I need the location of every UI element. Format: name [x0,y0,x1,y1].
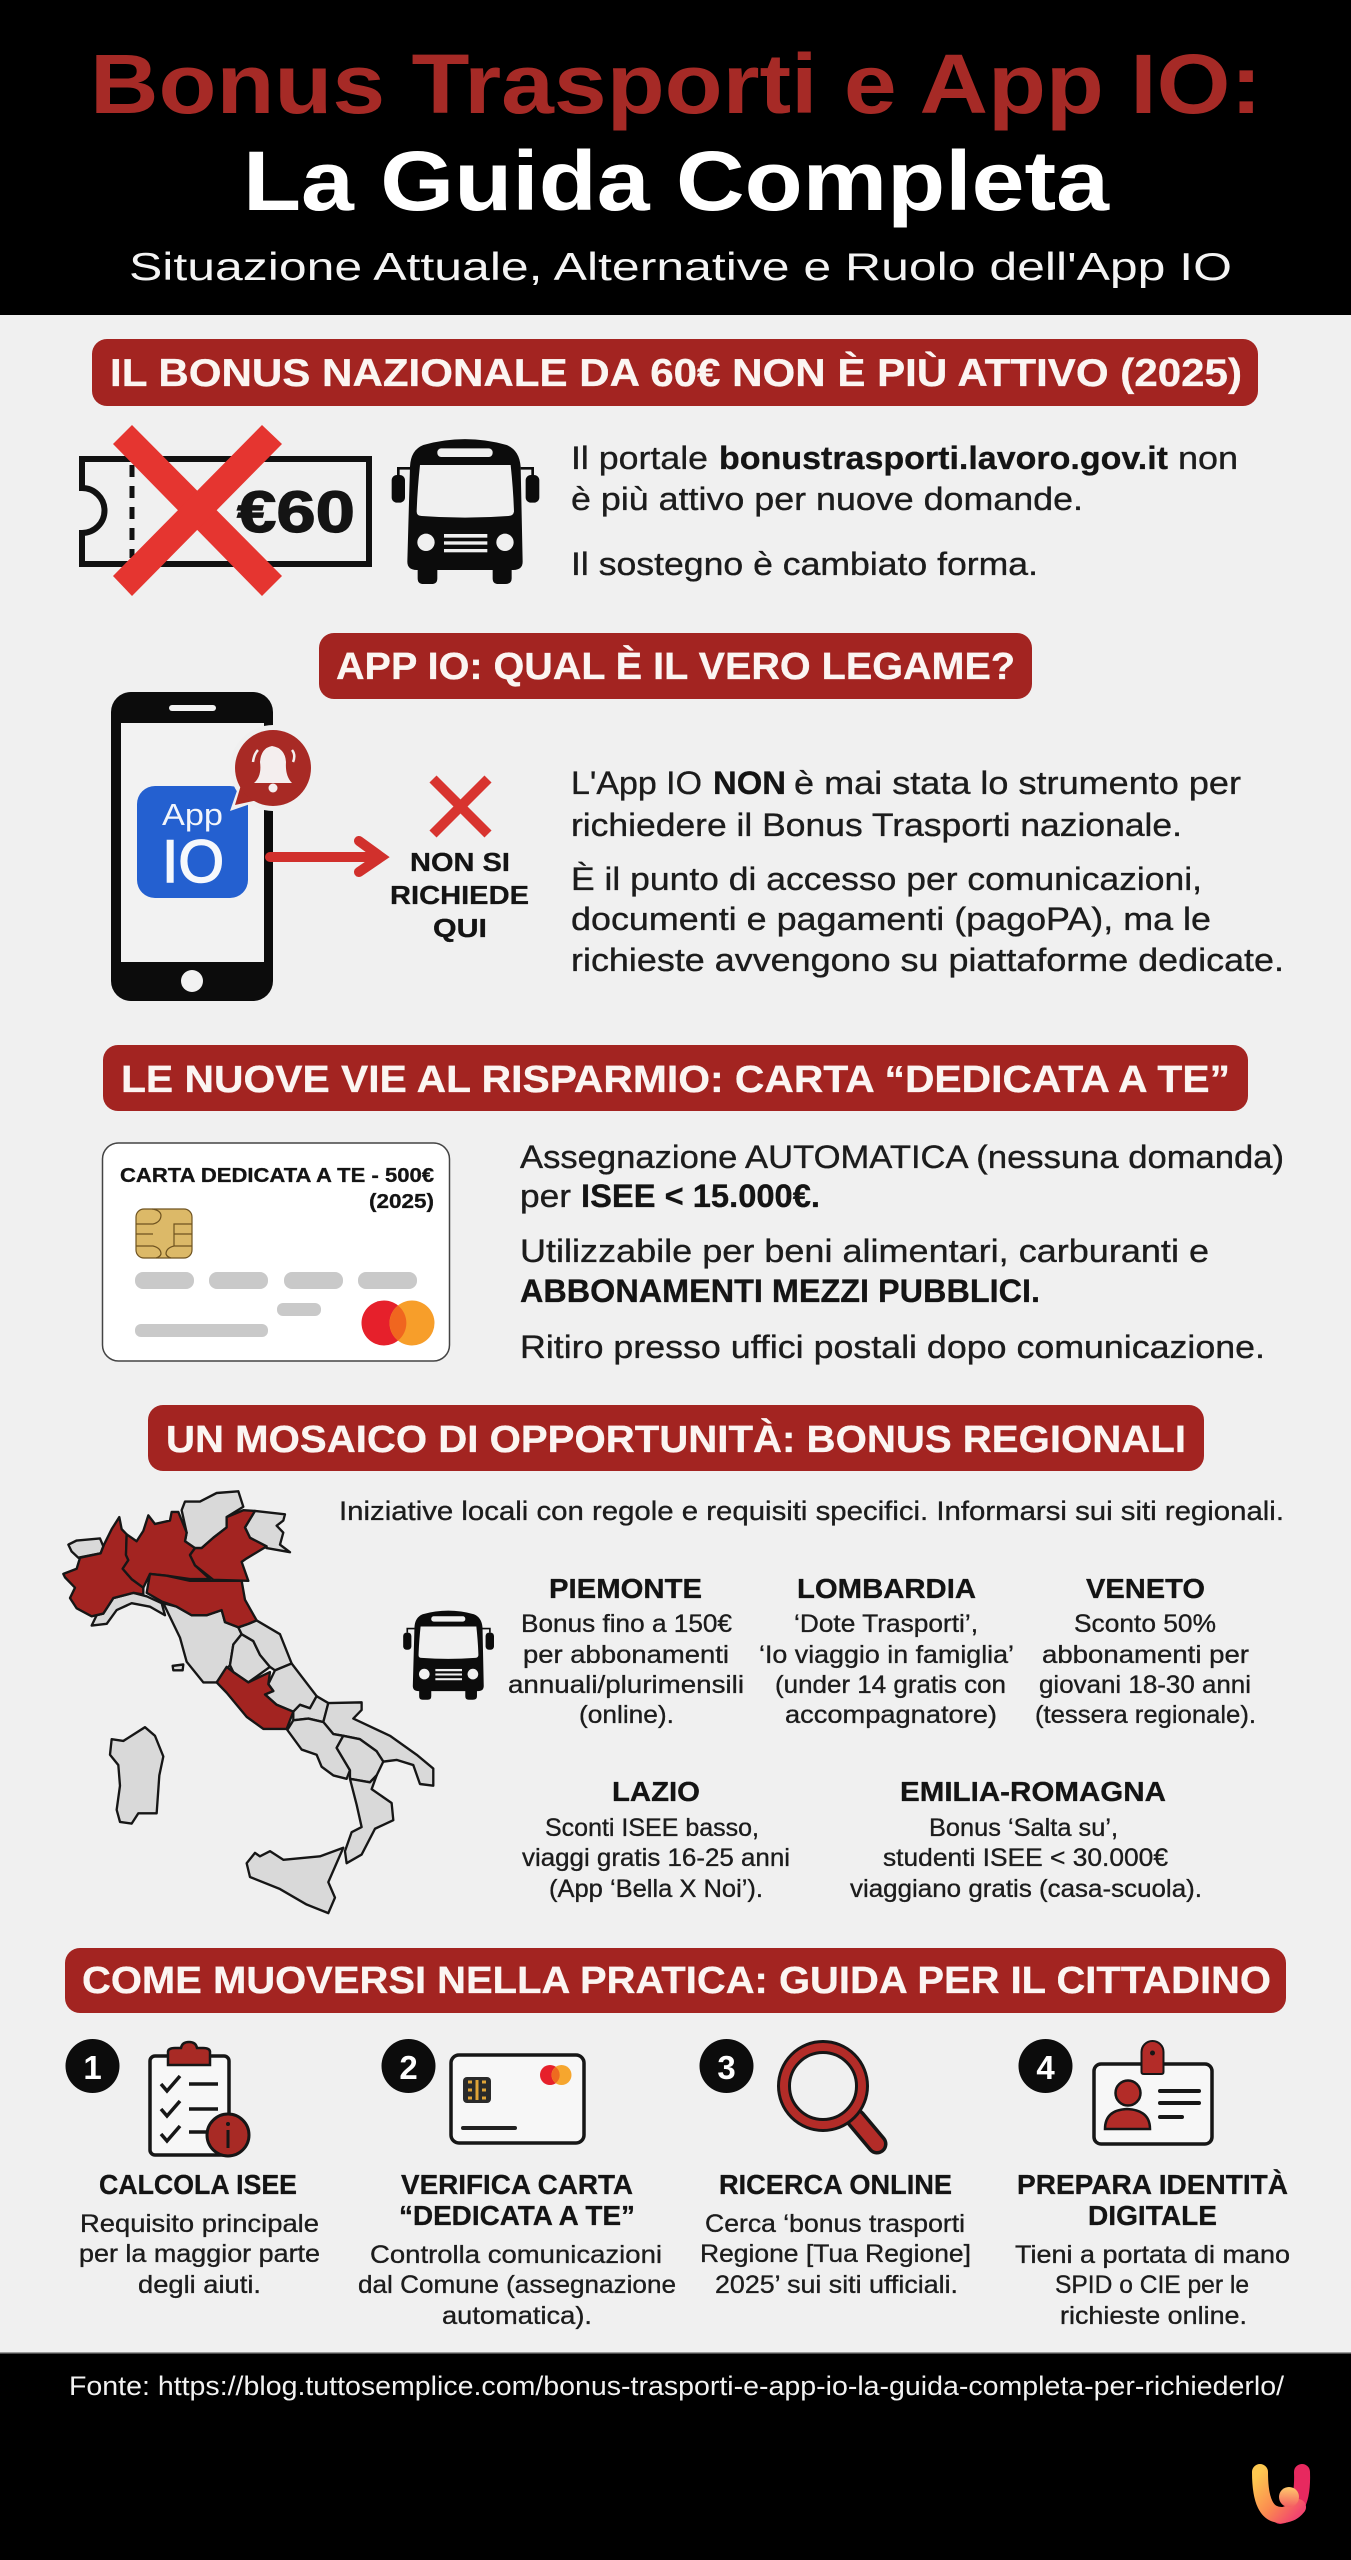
text block: portale: non [1178,440,1238,476]
text block: portale: bonustrasporti.lavoro.gov.it [719,440,1168,476]
step text 3: 2025’ sui siti ufficiali. [715,2271,958,2299]
step title 4: DIGITALE [1088,2200,1217,2231]
callout: non si richiede qui: RICHIEDE [390,880,529,910]
heading banner: bonus nazionale: IL BONUS NAZIONALE DA 60€ NON È PIÙ ATTIVO (2025) [110,351,1242,395]
step text 2: dal Comune (assegnazione [358,2271,676,2299]
panel: bonus regionali [63,1405,1284,1913]
icon: id badge [1094,2041,1212,2144]
region: lazio: viaggi gratis 16-25 anni [522,1844,790,1872]
step 2 [358,2039,676,2330]
icon: bus [392,439,539,584]
number badge 2: 2 [399,2049,418,2086]
region: lazio: (App ‘Bella X Noi’). [549,1875,763,1903]
step text 3: Cerca ‘bonus trasporti [705,2210,965,2238]
step text 4: Tieni a portata di mano [1015,2241,1290,2269]
region: veneto: VENETO [1086,1573,1205,1604]
text block: app io role: documenti e pagamenti (pagoPA), ma le [571,901,1211,937]
text block: carta details: ISEE < 15.000€. [581,1178,820,1214]
region: lombardia: ‘Dote Trasporti’, [794,1610,978,1638]
icon: card logo [362,1300,434,1346]
step text 2: Controlla comunicazioni [370,2241,662,2269]
text block: carta details: per [520,1178,571,1214]
text block: app io role: richiedere il Bonus Trasporti nazionale. [571,807,1182,843]
icon: notification bell [230,725,316,811]
step title 4: PREPARA IDENTITÀ [1017,2169,1288,2200]
number badge 3: 3 [717,2049,736,2086]
step title 4 [1017,2169,1288,2231]
text block: portale: Il portale [571,440,708,476]
region: piemonte: annuali/plurimensili [508,1671,744,1699]
icon: crossed out 60 euro ticket [82,425,369,596]
text block: app io role: È il punto di accesso per comunicazioni, [571,861,1202,897]
region: lazio: Sconti ISEE basso, [545,1814,759,1842]
map of italy [63,1491,433,1913]
number badge 1 [66,2039,120,2093]
callout: non si richiede qui: QUI [433,913,487,943]
heading banner: bonus nazionale [92,339,1258,406]
text block: carta details: ABBONAMENTI MEZZI PUBBLICI. [520,1273,1040,1309]
region: piemonte [508,1573,744,1729]
text block: app io role: L'App IO [571,765,702,801]
step title 2: VERIFICA CARTA [401,2169,633,2200]
step text 4: richieste online. [1060,2302,1247,2330]
callout: non si richiede qui: NON SI [410,847,510,877]
text block: app io role: NON [713,765,786,801]
region: emilia-romagna: EMILIA-ROMAGNA [900,1776,1166,1807]
text block: app io role: richieste avvengono su piattaforme dedicate. [571,942,1284,978]
region: piemonte: per abbonamenti [523,1641,729,1669]
intro text: Iniziative locali con regole e requisiti specifici. Informarsi sui siti regionali. [339,1496,1284,1526]
step title 2: “DEDICATA A TE” [399,2200,635,2231]
region: veneto: (tessera regionale). [1035,1701,1256,1729]
icon: red x [433,779,488,834]
panel: carta dedicata a te [102,1045,1284,1365]
footer band [0,2352,1351,2560]
region: veneto [1035,1573,1256,1729]
header band [0,0,1351,315]
region: emilia-romagna: viaggiano gratis (casa-scuola). [850,1875,1202,1903]
step text 4 [1015,2241,1290,2330]
callout: non si richiede qui [390,779,529,943]
step title 3: RICERCA ONLINE [719,2169,952,2200]
heading banner: regionali: UN MOSAICO DI OPPORTUNITÀ: BONUS REGIONALI [166,1417,1186,1461]
subtitle: Situazione Attuale, Alternative e Ruolo dell'App IO [129,246,1232,289]
text block: portale [571,440,1238,582]
text block: carta details [520,1139,1284,1365]
icon: magnifying glass [784,2047,877,2144]
number badge 4 [1018,2039,1072,2093]
region: lombardia [759,1573,1014,1729]
region: emilia-romagna [850,1776,1202,1903]
text block: app io role [571,765,1284,978]
step title 1: CALCOLA ISEE [99,2169,297,2200]
region: veneto: giovani 18-30 anni [1039,1671,1251,1699]
heading banner: guida [65,1948,1286,2013]
region: emilia-romagna: studenti ISEE < 30.000€ [883,1844,1168,1872]
icon: crossed out 60 euro ticket: €60 [237,480,355,545]
icon: card chip [136,1209,192,1258]
heading banner: regionali [148,1405,1204,1471]
text block: app io role: è mai stata lo strumento per [794,765,1241,801]
heading banner: guida: COME MUOVERSI NELLA PRATICA: GUIDA PER IL CITTADINO [82,1960,1271,2002]
icon: payment card [102,1143,450,1361]
text block: portale: Il sostegno è cambiato forma. [571,546,1038,582]
step 4 [1015,2039,1290,2330]
step text 1: per la maggior parte [79,2240,320,2268]
panel: guida per il cittadino [65,1948,1290,2330]
text block: portale: è più attivo per nuove domande. [571,481,1083,517]
region: emilia-romagna: Bonus ‘Salta su’, [929,1814,1118,1842]
heading banner: app io: APP IO: QUAL È IL VERO LEGAME? [336,644,1015,688]
heading banner: app io [319,633,1032,699]
step text 1 [79,2210,320,2299]
number badge 4: 4 [1036,2049,1055,2086]
region: lombardia: accompagnatore) [785,1701,997,1729]
step text 2: automatica). [442,2302,592,2330]
region: piemonte: PIEMONTE [549,1573,702,1604]
icon: card [451,2055,584,2143]
region: piemonte: (online). [579,1701,674,1729]
region: lombardia: (under 14 gratis con [775,1671,1006,1699]
logo [1260,2472,1302,2516]
number badge 2 [382,2039,436,2093]
step text 2 [358,2241,676,2330]
region: lombardia: ‘Io viaggio in famiglia’ [759,1641,1014,1669]
arrow: app to not here [270,841,381,872]
text block: carta details: Ritiro presso uffici postali dopo comunicazione. [520,1329,1265,1365]
heading banner: carta: LE NUOVE VIE AL RISPARMIO: CARTA “DEDICATA A TE” [121,1059,1230,1101]
icon: phone with app io: IO [162,828,224,895]
step text 3 [700,2210,971,2299]
region: veneto: abbonamenti per [1042,1641,1249,1669]
icon: phone with app io: App [162,797,223,832]
icon: bus small [403,1611,494,1700]
region: piemonte: Bonus fino a 150€ [521,1610,732,1638]
panel: app io [111,633,1284,1001]
title line 1: Bonus Trasporti e App IO: [90,37,1262,131]
icon: clipboard checklist [150,2042,249,2156]
icon: payment card: CARTA DEDICATA A TE - 500€ [120,1165,434,1187]
icon: payment card: (2025) [369,1191,434,1213]
region: lazio [522,1776,790,1903]
number badge 1: 1 [83,2049,102,2086]
region: lombardia: LOMBARDIA [797,1573,976,1604]
text block: carta details: Utilizzabile per beni alimentari, carburanti e [520,1233,1209,1269]
heading banner: carta [103,1045,1248,1111]
region: lazio: LAZIO [612,1776,700,1807]
step text 1: Requisito principale [80,2210,319,2238]
step 3 [700,2039,971,2299]
icon: phone with app io [111,692,316,1001]
panel: bonus nazionale [82,339,1258,596]
step text 1: degli aiuti. [138,2271,261,2299]
step title 2 [399,2169,635,2231]
source line: Fonte: https://blog.tuttosemplice.com/bonus-trasporti-e-app-io-la-guida-completa-per-richiederlo/ [69,2371,1285,2401]
step 1 [66,2039,320,2299]
step text 3: Regione [Tua Regione] [700,2240,971,2268]
text block: carta details: Assegnazione AUTOMATICA (nessuna domanda) [520,1139,1284,1175]
region: veneto: Sconto 50% [1074,1610,1216,1638]
step text 4: SPID o CIE per le [1055,2271,1249,2299]
title line 2: La Guida Completa [243,134,1110,228]
number badge 3 [700,2039,754,2093]
